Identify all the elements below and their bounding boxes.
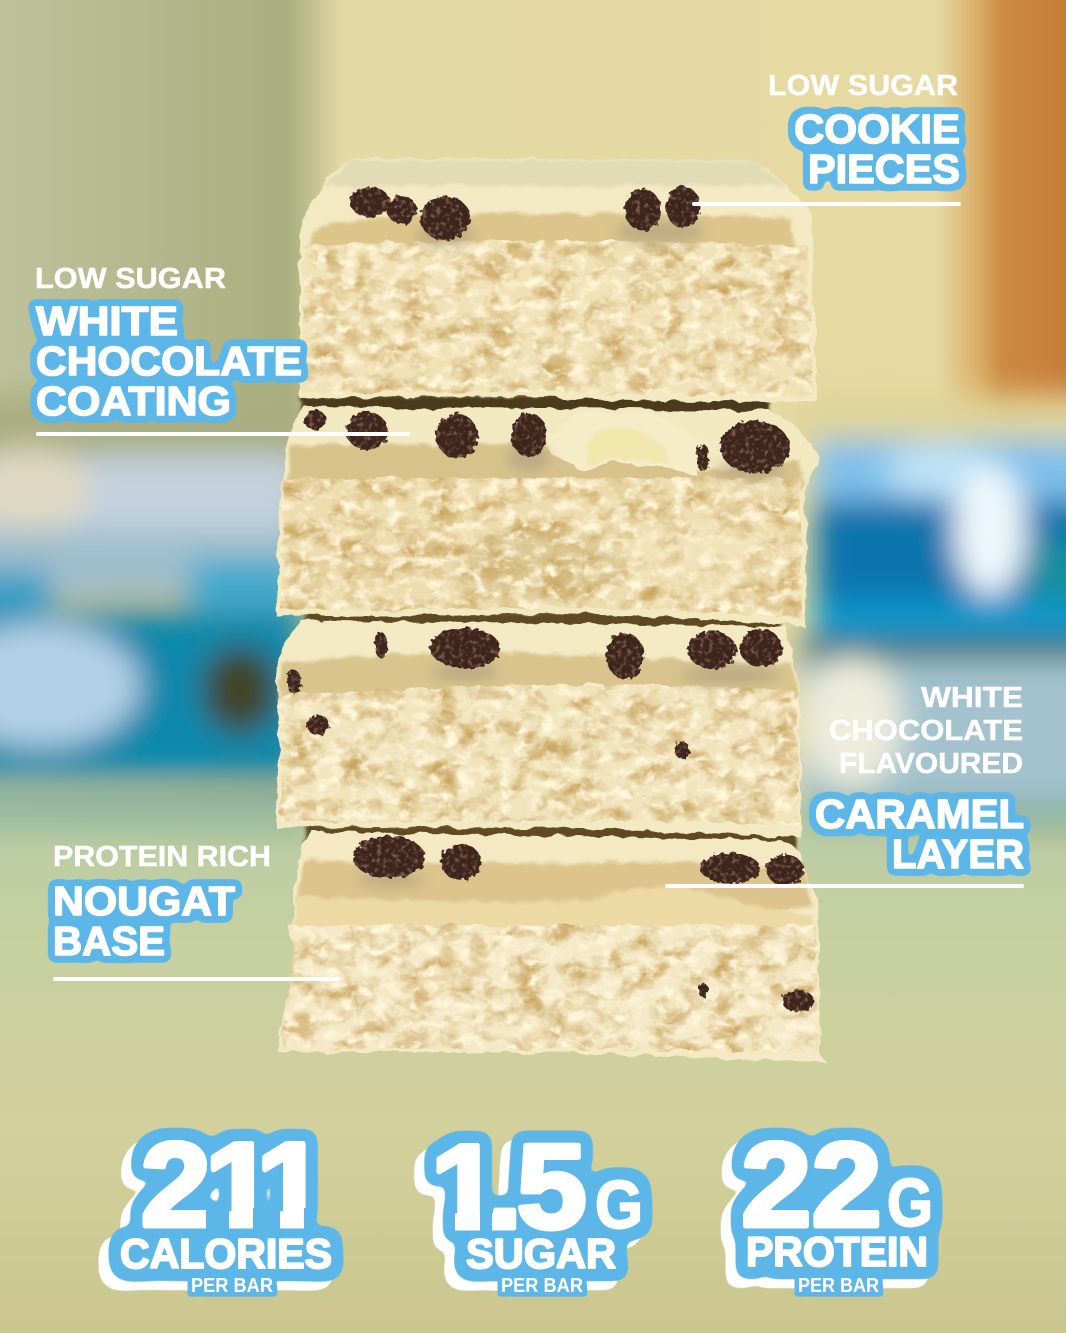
icon: cookie pieces — [287, 186, 814, 1012]
callout: low sugar cookie pieces: COOKIE — [794, 106, 960, 152]
bar 1 (top) — [300, 158, 816, 402]
stat value and label: 22 — [741, 1119, 882, 1252]
stacked bars photograph — [275, 158, 826, 1063]
callout: low sugar cookie pieces — [692, 70, 961, 206]
callout overline: CHOCOLATE — [829, 715, 1023, 747]
callout: protein rich nougat base: BASE — [53, 918, 165, 964]
stat value and label: G — [887, 1165, 933, 1241]
callout overline: LOW SUGAR — [768, 70, 958, 102]
bar 2 — [277, 396, 820, 626]
stat: 211 calories per bar — [120, 1119, 332, 1297]
callout: white chocolate flavoured caramel layer — [665, 682, 1024, 888]
stat value and label: 1.5 — [430, 1121, 587, 1254]
stat value and label: G — [595, 1167, 643, 1243]
per bar tag: PER BAR — [191, 1275, 274, 1297]
cookie smudges — [355, 220, 785, 888]
broken white chocolate chunk — [547, 413, 698, 477]
bar 3 — [275, 612, 802, 838]
callout overline: FLAVOURED — [839, 748, 1023, 780]
callout overline: WHITE — [921, 682, 1023, 714]
callout: low sugar white chocolate coating: WHITE — [36, 298, 178, 344]
stat: 22g protein per bar — [741, 1119, 933, 1297]
bar 4 (bottom) — [277, 826, 826, 1063]
stat value and label — [430, 1121, 643, 1277]
callout overline: PROTEIN RICH — [53, 841, 271, 873]
callout: low sugar white chocolate coating: COATING — [36, 378, 231, 424]
callout: low sugar cookie pieces: PIECES — [808, 146, 960, 192]
stat value and label: CALORIES — [120, 1230, 332, 1277]
callout: protein rich nougat base: NOUGAT — [53, 878, 235, 924]
stat value and label: SUGAR — [466, 1230, 616, 1277]
per bar tag: PER BAR — [798, 1275, 879, 1297]
callout: low sugar white chocolate coating: CHOCOLATE — [36, 338, 302, 384]
per bar tag: PER BAR — [501, 1275, 584, 1297]
stat value and label — [741, 1119, 933, 1275]
callout overline — [829, 682, 1023, 780]
callout: white chocolate flavoured caramel layer: CARAMEL — [815, 791, 1024, 837]
callout: white chocolate flavoured caramel layer: LAYER — [892, 831, 1024, 877]
stat: 1.5g sugar per bar — [430, 1121, 643, 1297]
callout overline: LOW SUGAR — [35, 263, 226, 295]
callout: protein rich nougat base — [53, 841, 340, 981]
stat value and label: 211 — [141, 1119, 326, 1252]
stat value and label: PROTEIN — [746, 1228, 928, 1275]
callout: low sugar white chocolate coating — [35, 263, 410, 436]
